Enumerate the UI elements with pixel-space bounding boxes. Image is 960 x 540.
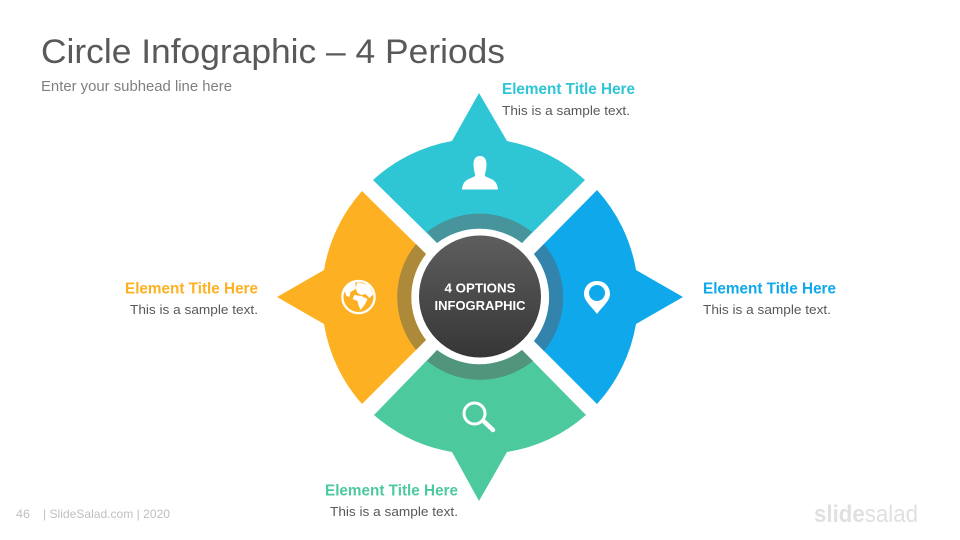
center hub: INFOGRAPHIC xyxy=(434,298,526,313)
label: right: This is a sample text. xyxy=(703,302,831,317)
logo: slidesalad: slidesalad xyxy=(814,501,918,528)
label: bottom: Element Title Here xyxy=(325,482,458,500)
segment: left xyxy=(277,191,426,404)
icon: magnifier xyxy=(464,403,493,430)
icon: location pin xyxy=(584,281,610,314)
label: left xyxy=(125,280,258,317)
center hub xyxy=(419,236,541,358)
title: Circle Infographic – 4 Periods xyxy=(41,33,505,71)
label: left: This is a sample text. xyxy=(130,302,258,317)
label: top xyxy=(502,81,635,118)
label: bottom: This is a sample text. xyxy=(330,504,458,519)
label: right: Element Title Here xyxy=(703,280,836,298)
segment: bottom xyxy=(374,350,586,501)
footer: page number and credit: 46 xyxy=(16,507,30,521)
label: top: This is a sample text. xyxy=(502,103,630,118)
footer: page number and credit: | SlideSalad.com | 2020 xyxy=(43,507,170,521)
label: bottom xyxy=(325,482,458,519)
label: top: Element Title Here xyxy=(502,81,635,98)
segment: top xyxy=(373,93,585,243)
icon: person xyxy=(462,156,498,190)
icon: globe xyxy=(341,280,376,314)
subhead: Enter your subhead line here xyxy=(41,79,232,95)
label: right xyxy=(703,280,836,317)
segment: right xyxy=(534,190,683,404)
label: left: Element Title Here xyxy=(125,280,258,298)
center hub: 4 OPTIONS xyxy=(444,280,516,296)
